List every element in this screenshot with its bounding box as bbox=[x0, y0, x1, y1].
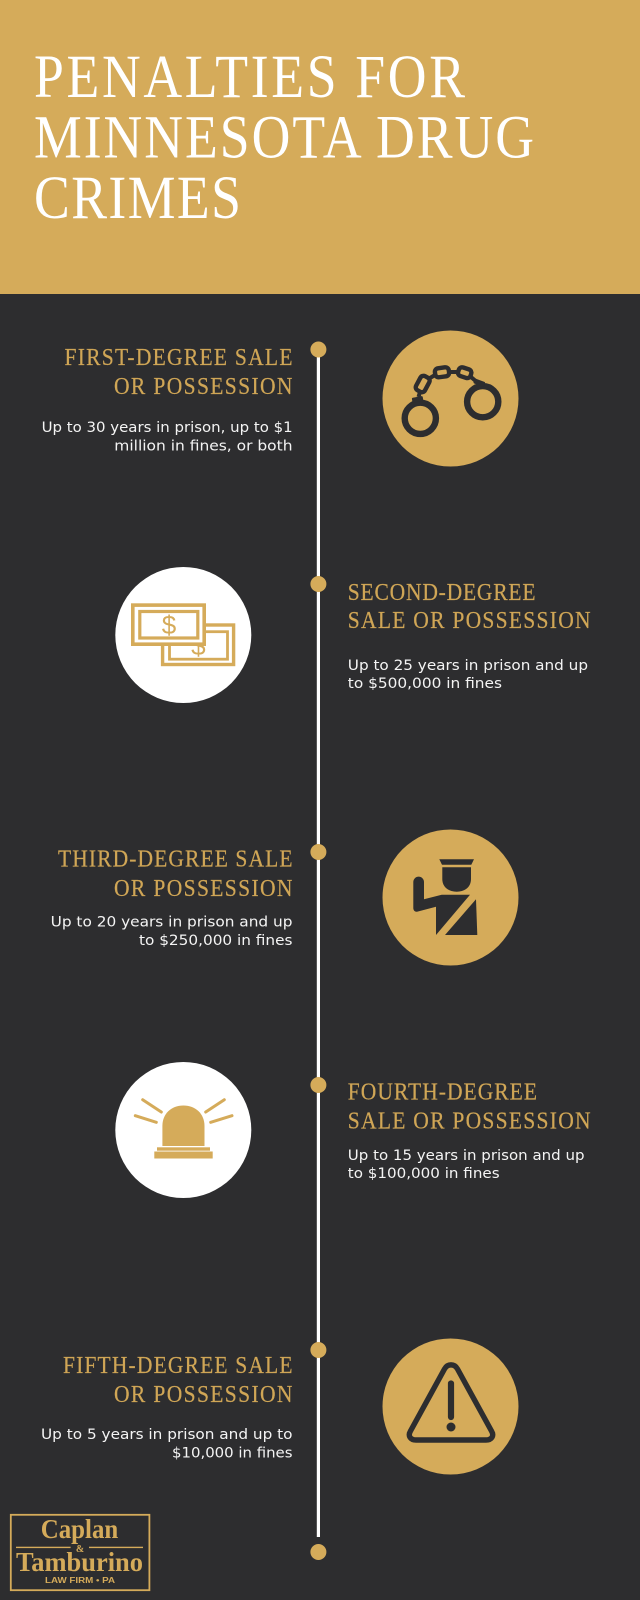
heading: second degree: SALE OR POSSESSION bbox=[348, 606, 591, 633]
text: first degree penalty bbox=[42, 420, 293, 454]
text: second degree penalty: Up to 25 years in prison and up bbox=[348, 658, 588, 674]
heading: fourth degree bbox=[348, 1077, 591, 1134]
heading: fifth degree: FIFTH-DEGREE SALE bbox=[63, 1351, 293, 1378]
logo: Caplan & Tamburino bbox=[11, 1514, 149, 1590]
title: MINNESOTA DRUG bbox=[34, 104, 534, 171]
title: PENALTIES FOR bbox=[34, 44, 466, 111]
logo: Caplan & Tamburino: Tamburino bbox=[16, 1547, 143, 1577]
panel: fifth degree bbox=[41, 1338, 518, 1474]
heading: fourth degree: FOURTH-DEGREE bbox=[348, 1077, 537, 1105]
heading: first degree bbox=[64, 343, 293, 399]
icon: police officer bbox=[382, 830, 518, 966]
heading: third degree bbox=[58, 844, 293, 901]
header banner bbox=[0, 0, 640, 294]
icon: warning triangle bbox=[382, 1338, 518, 1474]
text: first degree penalty: Up to 30 years in prison, up to $1 bbox=[42, 420, 293, 436]
text: fifth degree penalty: $10,000 in fines bbox=[172, 1446, 292, 1462]
heading: second degree bbox=[348, 578, 591, 633]
panel: third degree bbox=[51, 830, 518, 966]
heading: second degree: SECOND-DEGREE bbox=[348, 578, 536, 605]
text: fourth degree penalty: to $100,000 in fines bbox=[348, 1166, 500, 1182]
logo: Caplan & Tamburino: & bbox=[76, 1544, 84, 1555]
title: CRIMES bbox=[34, 165, 241, 232]
timeline bbox=[310, 342, 326, 1560]
panel: first degree bbox=[42, 330, 518, 466]
heading: fourth degree: SALE OR POSSESSION bbox=[348, 1106, 591, 1134]
text: first degree penalty: million in fines, or both bbox=[114, 438, 292, 454]
text: fifth degree penalty bbox=[41, 1427, 293, 1462]
text: second degree penalty bbox=[348, 658, 588, 692]
icon: siren bbox=[115, 1062, 251, 1198]
panel: second degree bbox=[115, 567, 591, 703]
text: third degree penalty: to $250,000 in fines bbox=[139, 933, 292, 949]
text: fifth degree penalty: Up to 5 years in prison and up to bbox=[41, 1427, 293, 1443]
panel: fourth degree bbox=[115, 1062, 591, 1198]
logo: Caplan & Tamburino: Caplan bbox=[41, 1514, 118, 1544]
text: second degree penalty: to $500,000 in fines bbox=[348, 676, 502, 692]
icon: money bills bbox=[115, 567, 251, 703]
text: third degree penalty bbox=[51, 915, 292, 949]
logo: Caplan & Tamburino: LAW FIRM • PA bbox=[45, 1576, 115, 1585]
icon: handcuffs bbox=[382, 330, 518, 466]
heading: first degree: FIRST-DEGREE SALE bbox=[64, 343, 293, 370]
heading: third degree: OR POSSESSION bbox=[114, 874, 293, 901]
icon: money bills: $ bbox=[162, 610, 177, 640]
title bbox=[34, 44, 534, 232]
text: fourth degree penalty: Up to 15 years in prison and up bbox=[348, 1148, 584, 1164]
icon: money bills: $ bbox=[191, 631, 206, 661]
text: fourth degree penalty bbox=[348, 1148, 584, 1182]
heading: fifth degree bbox=[63, 1351, 293, 1407]
heading: first degree: OR POSSESSION bbox=[114, 372, 293, 399]
text: third degree penalty: Up to 20 years in prison and up bbox=[51, 915, 292, 931]
heading: third degree: THIRD-DEGREE SALE bbox=[58, 844, 293, 872]
heading: fifth degree: OR POSSESSION bbox=[114, 1380, 293, 1407]
